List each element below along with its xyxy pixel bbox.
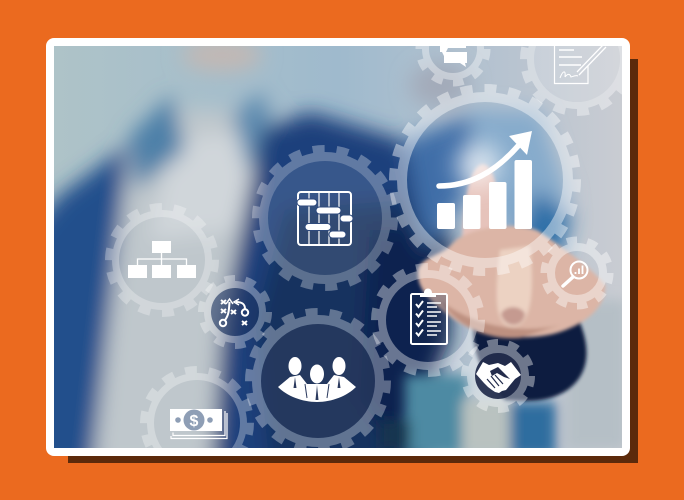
icon: clipboard checklist bbox=[411, 288, 447, 344]
icon: business team bbox=[278, 357, 356, 402]
gear: team bbox=[249, 312, 387, 450]
infographic canvas bbox=[46, 38, 638, 463]
gear: growth chart bbox=[394, 88, 576, 272]
blurred foreground bottom colours bbox=[380, 300, 626, 457]
hand bbox=[418, 164, 605, 338]
white photo frame bbox=[46, 38, 630, 456]
icon: gantt chart bbox=[297, 192, 353, 245]
gear: money bbox=[140, 366, 254, 448]
icon: playbook strategy bbox=[220, 299, 248, 326]
sleeve bbox=[473, 312, 586, 401]
icon: handshake bbox=[476, 362, 521, 393]
gear: chat bbox=[416, 46, 490, 86]
icon: signed document bbox=[554, 40, 606, 84]
gear: magnifier analytics bbox=[544, 240, 610, 306]
icon: chat bubbles bbox=[440, 44, 467, 67]
gear: org chart bbox=[109, 207, 215, 313]
icon: banknotes bbox=[170, 409, 227, 438]
icon: magnifier with bars bbox=[563, 262, 588, 286]
drop shadow panel bbox=[68, 59, 638, 463]
icon: org chart bbox=[128, 241, 196, 278]
gear: gantt schedule bbox=[256, 149, 394, 287]
gears layer bbox=[105, 46, 622, 448]
photo: blurred businessman pressing gears bbox=[54, 46, 622, 448]
gear: playbook bbox=[202, 278, 268, 346]
finger glow bbox=[456, 143, 500, 187]
gear: contract bbox=[520, 46, 622, 116]
blurred suit and shirt bbox=[30, 39, 572, 470]
gear: handshake bbox=[464, 342, 532, 410]
icon: banknotes: $ bbox=[190, 413, 199, 430]
gear: checklist bbox=[375, 267, 481, 373]
icon: bar chart with rising arrow bbox=[437, 131, 532, 229]
